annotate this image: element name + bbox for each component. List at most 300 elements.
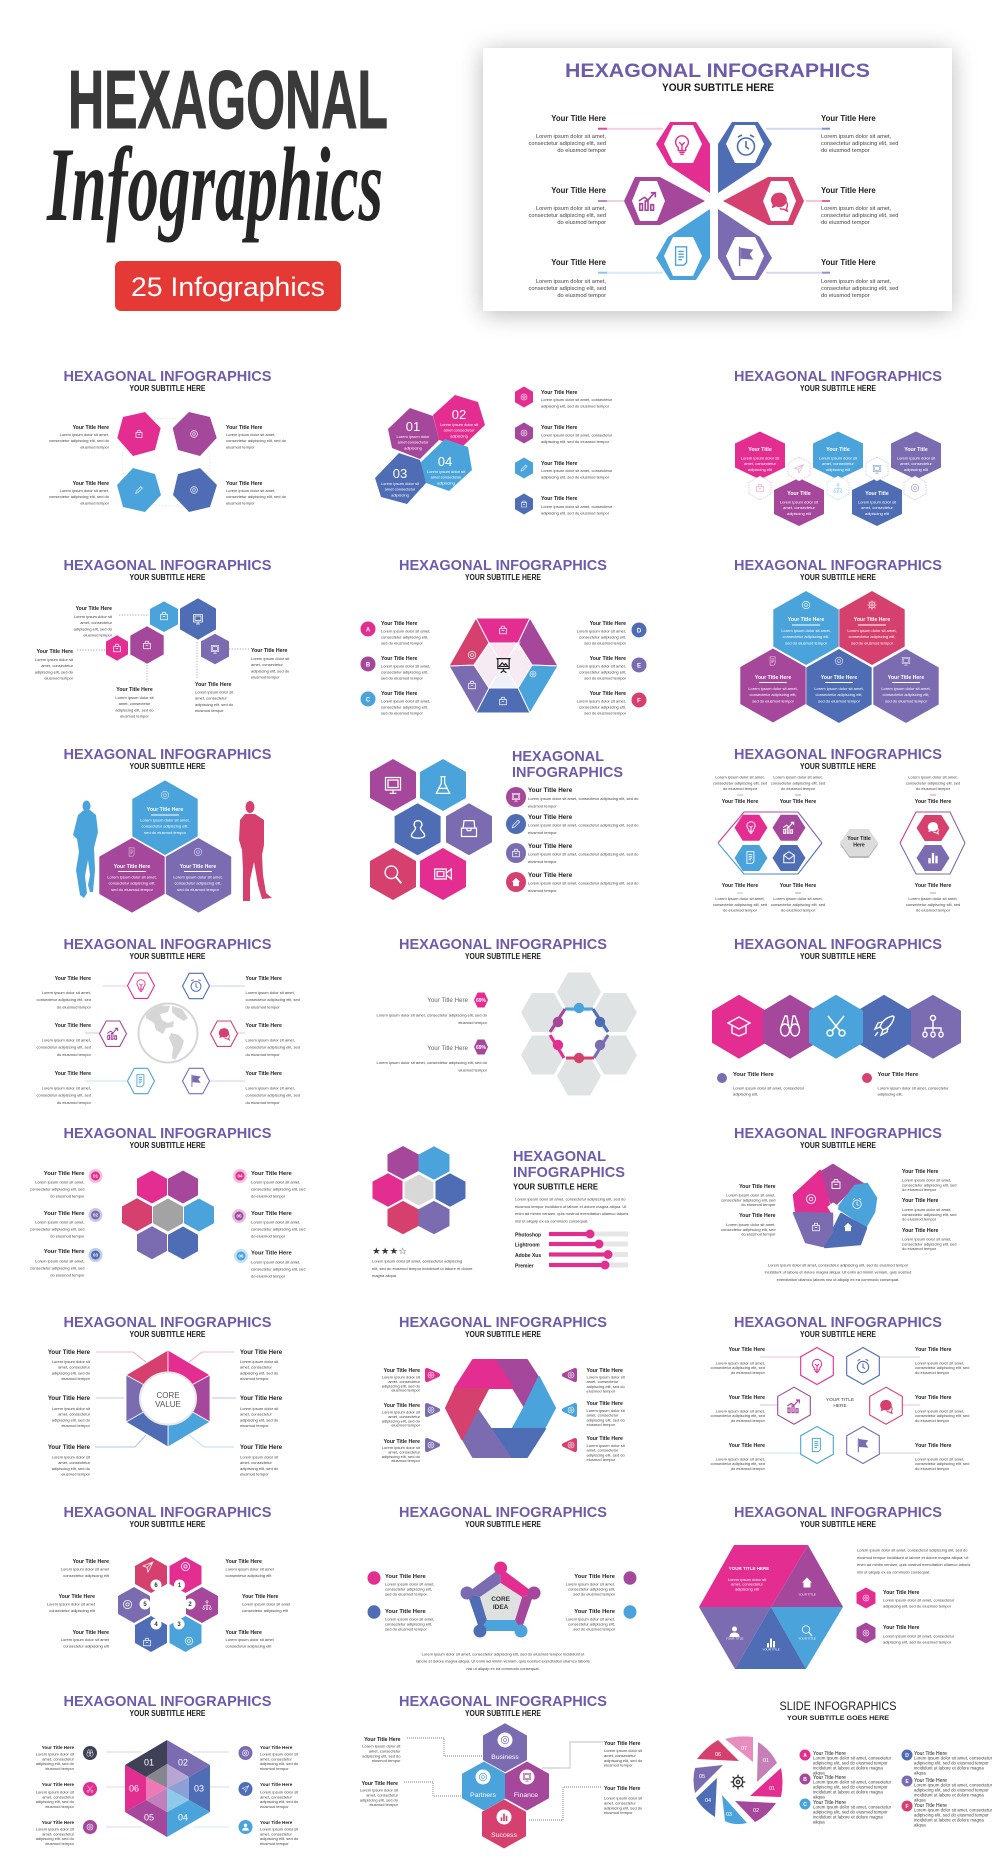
wheel blades bbox=[694, 1736, 782, 1824]
left text: Lorem ipsum dolor sit amet, bbox=[35, 1258, 84, 1264]
card text: right column: Lorem ipsum dolor sit amet, bbox=[821, 206, 891, 212]
right text bbox=[586, 1368, 626, 1462]
heading: HEXAGONAL INFOGRAPHICS bbox=[734, 558, 942, 574]
letter badges: F bbox=[637, 698, 641, 704]
left list text: Lorem ipsum dolor sit amet, bbox=[381, 664, 430, 668]
right text: amet, consectetur bbox=[260, 1831, 292, 1836]
panel 2: numbered hexagons with list bbox=[375, 386, 613, 515]
callout text: adipiscing elit, sed do bbox=[251, 668, 290, 673]
text blocks: Lorem ipsum dolor sit amet, consectetur adipiscing elit, sed do bbox=[376, 1060, 487, 1065]
heading: YOUR SUBTITLE HERE bbox=[130, 384, 206, 393]
hexagon text: sed do eiusmod tempor bbox=[111, 887, 154, 892]
hexagon text: adipiscing elit bbox=[865, 511, 890, 516]
callout text: amet, consectetur bbox=[195, 696, 227, 701]
callout text: amet, consectetur bbox=[119, 701, 151, 706]
hexagon text: sed do eiusmod tempor bbox=[851, 640, 894, 645]
left text: Your Title Here bbox=[48, 1396, 91, 1402]
left text: Lorem ipsum dolor sit bbox=[52, 1359, 90, 1364]
right text: do eiusmod tempor bbox=[902, 1246, 937, 1251]
right list text: sed do eiusmod tempor bbox=[584, 710, 627, 716]
left text: amet, consectetur bbox=[388, 1379, 421, 1384]
top text blocks: Your Title Here bbox=[915, 799, 951, 805]
card text: right column: Lorem ipsum dolor sit amet, bbox=[821, 279, 891, 285]
bottom text blocks: consectetur adipiscing elit, sed bbox=[906, 902, 960, 907]
hexagon text: Lorem ipsum dolor sit amet, bbox=[107, 874, 157, 880]
callout text: eiusmod tempor bbox=[251, 675, 280, 680]
heading bbox=[64, 747, 272, 771]
right list text: aliqua bbox=[914, 1822, 926, 1828]
right text: Your Title Here bbox=[246, 976, 282, 982]
gem hexagon: 06 bbox=[129, 1784, 139, 1794]
left text: do eiusmod tempor bbox=[50, 1234, 85, 1238]
text blocks left: Your Title Here bbox=[73, 481, 109, 487]
list text: Lorem ipsum dolor sit amet, consectetur bbox=[883, 1634, 954, 1638]
list icons bbox=[515, 386, 533, 514]
right text: Lorem ipsum dolor sit amet, bbox=[246, 1038, 295, 1042]
right text bbox=[240, 1350, 283, 1477]
skill bars: Photoshop bbox=[515, 1232, 541, 1238]
left text: Lorem ipsum dolor sit bbox=[36, 1826, 74, 1832]
heading: YOUR SUBTITLE HERE bbox=[465, 1330, 542, 1339]
numbered badges: 01 bbox=[93, 1174, 98, 1178]
number badges: 5 bbox=[143, 1602, 147, 1608]
number badges: 1 bbox=[178, 1583, 182, 1589]
right text: adipiscing elit, sed do bbox=[260, 1761, 299, 1766]
numbered hexagon cluster: 01 bbox=[406, 419, 420, 434]
left text: sed do eiusmod tempor bbox=[385, 1626, 427, 1631]
panel 19: numbered hexagon ring bbox=[47, 1505, 291, 1652]
left text: eiusmod tempor bbox=[45, 1766, 75, 1771]
panel 13: hexagon flower with numbered lists bbox=[30, 1126, 305, 1278]
core circle: VALUE bbox=[155, 1400, 181, 1409]
left text: Lorem ipsum dolor sit bbox=[382, 1410, 420, 1414]
list text: Lorem ipsum dolor sit amet, consectetur adipiscing elit, sed do bbox=[528, 796, 638, 801]
left text: adipiscing elit, sed do bbox=[36, 1799, 75, 1804]
numbered hexagon cluster: amet consectetur bbox=[398, 440, 429, 445]
text blocks left: Lorem ipsum dolor sit amet, bbox=[60, 488, 109, 493]
percent badges: 69% bbox=[476, 1045, 487, 1051]
left text: do eiusmod tempor bbox=[57, 1100, 92, 1105]
heading bbox=[734, 1505, 942, 1529]
hexagon text: Lorem ipsum dolor sit bbox=[728, 1577, 766, 1582]
list text: adipiscing elit, sed do eiusmod tempor bbox=[883, 1604, 952, 1609]
left text: Your Title Here bbox=[729, 1443, 765, 1449]
right text: Your Title Here bbox=[251, 1171, 292, 1177]
wheel blades: 02 bbox=[753, 1808, 759, 1814]
left list text: Your Title Here bbox=[813, 1751, 846, 1757]
hexagon text: sed do eiusmod tempor bbox=[885, 698, 928, 703]
right text: consectetur adipiscing elit, sed bbox=[902, 1182, 956, 1187]
text blocks bbox=[376, 997, 488, 1072]
petal: light blue document bbox=[656, 209, 710, 280]
paragraph: eiusmod tempor incididunt ut labore et dolore magna aliqua. Ut bbox=[857, 1555, 969, 1560]
right text: do eiusmod tempor bbox=[246, 1100, 280, 1105]
bottom paragraph: labore et dolore magna aliqua. Ut enim ad minim veniam, quis nostrud exercitation ullamco laboris bbox=[416, 1659, 590, 1664]
paragraph right: enim ad minim veniam, quis nostrud exercitation ullamco laboris bbox=[515, 1211, 628, 1216]
letter badges: C bbox=[803, 1802, 807, 1808]
heading: HEXAGONAL INFOGRAPHICS bbox=[734, 937, 942, 953]
card text: right column: do eiusmod tempor bbox=[821, 220, 870, 226]
right list text: incididunt ut labore et dolore magna bbox=[914, 1792, 984, 1798]
panel 18: outlined hexagon ring with center title bbox=[711, 1315, 969, 1471]
callout text: adipiscing elit, sed do bbox=[35, 669, 74, 674]
letter badges: A bbox=[366, 628, 371, 634]
hexagon text: adipiscing elit bbox=[826, 467, 851, 472]
hexagon text: YOUR TITLE bbox=[798, 1636, 816, 1640]
hexagon text: Lorem ipsum dolor sit bbox=[858, 500, 896, 504]
left text: consectetur adipiscing elit, sed bbox=[721, 1197, 776, 1202]
right list text: consectetur adipiscing elit, bbox=[579, 634, 626, 640]
left text: do eiusmod tempor bbox=[50, 1194, 85, 1198]
heading: YOUR SUBTITLE HERE bbox=[465, 1520, 542, 1529]
right text: Lorem ipsum dolor sit amet, bbox=[566, 1616, 615, 1622]
letter badges: A bbox=[803, 1753, 807, 1759]
numbered badges: 03 bbox=[93, 1252, 98, 1258]
heading: YOUR SUBTITLE HERE bbox=[800, 1330, 877, 1339]
right list text: aliqua bbox=[914, 1798, 926, 1802]
right text: amet, consectetur bbox=[586, 1448, 619, 1453]
numbered hexagon cluster: adipiscing bbox=[391, 492, 409, 497]
left text: Lorem ipsum dolor sit bbox=[382, 1374, 420, 1380]
callout text: adipiscing elit, sed do bbox=[115, 707, 154, 712]
right text: consectetur adipiscing elit, sed bbox=[915, 1413, 969, 1418]
paragraph: nisi ut aliquip ex ea commodo consequat. bbox=[857, 1569, 930, 1574]
heading bbox=[399, 1694, 607, 1718]
gray hexagons bbox=[521, 972, 637, 1096]
card text: left column: consectetur adipiscing elit, sed bbox=[529, 286, 606, 292]
card text: left column: Lorem ipsum dolor sit amet, bbox=[536, 279, 606, 285]
hexagons: Success bbox=[491, 1832, 517, 1839]
left list text: adipiscing elit, sed do eiusmod tempor bbox=[813, 1810, 888, 1814]
heading: HEXAGONAL INFOGRAPHICS bbox=[64, 1315, 272, 1331]
right text: do eiusmod tempor bbox=[246, 1004, 280, 1009]
numbered hexagon cluster: adipiscing bbox=[404, 445, 422, 450]
top text blocks: do eiusmod tempor bbox=[916, 786, 951, 791]
core circle: CORE bbox=[156, 1391, 180, 1400]
text blocks right: eiusmod tempor bbox=[226, 500, 255, 505]
letter badges: B bbox=[366, 662, 371, 668]
right text: Lorem ipsum dolor sit amet, bbox=[902, 1207, 951, 1212]
right text: amet, consectetur bbox=[240, 1365, 272, 1370]
left text: Your Title Here bbox=[362, 1781, 398, 1787]
percent badges: 69% bbox=[476, 998, 487, 1004]
left list text bbox=[381, 621, 430, 716]
wheel blades: 07 bbox=[741, 1746, 747, 1752]
left text: amet, consectetur bbox=[388, 1449, 421, 1454]
left text: Lorem ipsum dolor sit amet, bbox=[35, 1220, 84, 1224]
hexagon text: Lorem ipsum dolor sit amet, bbox=[748, 686, 798, 691]
dotted connectors bbox=[404, 1738, 602, 1820]
right list text: Your Title Here bbox=[914, 1751, 947, 1757]
left text: amet, consectetur bbox=[42, 1756, 75, 1761]
left list text: incididunt ut labore et dolore magna bbox=[813, 1766, 883, 1770]
left text: Your Title Here bbox=[385, 1609, 426, 1615]
colored ring bbox=[550, 1003, 608, 1063]
right text: Your Title Here bbox=[242, 1594, 279, 1600]
callout text: eiusmod tempor bbox=[83, 633, 113, 638]
heading: INFOGRAPHICS bbox=[512, 764, 623, 781]
right list text: Your Title Here bbox=[590, 621, 626, 627]
left text: do eiusmod tempor bbox=[741, 1232, 776, 1237]
inner hexagons bbox=[734, 815, 950, 871]
heading: YOUR SUBTITLE HERE bbox=[130, 1520, 206, 1529]
heading: YOUR SUBTITLE HERE bbox=[465, 1709, 542, 1718]
top text blocks: Your Title Here bbox=[780, 799, 816, 805]
right list text: sed do eiusmod tempor bbox=[584, 676, 627, 680]
left list text: Lorem ipsum dolor sit amet, bbox=[381, 628, 430, 634]
letter badges: D bbox=[905, 1753, 909, 1759]
right list text: adipiscing elit, sed do eiusmod tempor bbox=[914, 1760, 989, 1766]
hexagon text: YOUR TITLE HERE bbox=[729, 1566, 769, 1571]
top text blocks: consectetur adipiscing elit, sed bbox=[906, 780, 960, 785]
text blocks right: consectetur adipiscing elit, sed do bbox=[226, 494, 287, 499]
left text: Lorem ipsum dolor sit amet bbox=[47, 1602, 95, 1606]
numbered hexagon cluster: Lorem ipsum dolor sit bbox=[381, 481, 419, 486]
right text: Lorem ipsum dolor sit bbox=[240, 1454, 278, 1460]
panel 22: gem hexagon with badges bbox=[36, 1694, 299, 1846]
card text: left column: Lorem ipsum dolor sit amet, bbox=[536, 134, 606, 140]
top text blocks: do eiusmod tempor bbox=[723, 786, 758, 791]
left text: adipiscing elit, sed do bbox=[36, 1836, 75, 1841]
connector lines bbox=[95, 1352, 236, 1447]
top text blocks: do eiusmod tempor bbox=[781, 786, 816, 791]
heading bbox=[64, 1315, 272, 1339]
left text: amet, consectetur bbox=[388, 1414, 421, 1419]
hexagon ring bbox=[118, 1557, 218, 1652]
left text bbox=[711, 1347, 766, 1471]
right text: Lorem ipsum dolor sit amet bbox=[226, 1566, 274, 1572]
callout text bbox=[35, 606, 290, 719]
text blocks: eiusmod tempor bbox=[458, 1020, 488, 1025]
list text: Your Title Here bbox=[883, 1625, 920, 1631]
right text: do eiusmod tempor bbox=[915, 1418, 950, 1423]
list text: Your Title Here bbox=[883, 1590, 920, 1596]
heading: YOUR SUBTITLE HERE bbox=[800, 952, 877, 961]
text blocks right: Lorem ipsum dolor sit amet, bbox=[226, 488, 275, 493]
left list text: consectetur adipiscing elit, bbox=[381, 704, 428, 710]
right text: Lorem ipsum dolor sit bbox=[604, 1748, 642, 1753]
list text: Your Title Here bbox=[541, 390, 578, 396]
text blocks right bbox=[226, 425, 287, 505]
left list text: sed do eiusmod tempor bbox=[381, 710, 423, 716]
hexagon text: sed do eiusmod tempor bbox=[752, 698, 795, 703]
hexagon text: amet, consectetur bbox=[731, 1582, 764, 1587]
right text: Your Title Here bbox=[260, 1782, 293, 1787]
left text: Your Title Here bbox=[384, 1403, 420, 1409]
right list text bbox=[914, 1751, 993, 1828]
callout text: Your Title Here bbox=[195, 682, 232, 688]
dotted connectors bbox=[77, 615, 249, 682]
right text: consectetur adipiscing elit bbox=[226, 1573, 272, 1578]
right text: Your Title Here bbox=[251, 1250, 292, 1256]
numbered hexagon cluster: 03 bbox=[393, 466, 407, 481]
card text: left column: consectetur adipiscing elit, sed bbox=[529, 141, 606, 147]
connector lines bbox=[85, 986, 245, 1081]
left text bbox=[48, 1350, 91, 1477]
right list text: incididunt ut labore et dolore magna bbox=[914, 1818, 984, 1822]
left text: adipiscing elit, sed do bbox=[382, 1383, 421, 1388]
right text: adipiscing elit, sed do bbox=[260, 1799, 299, 1804]
right text: eiusmod tempor bbox=[586, 1389, 616, 1394]
left text: Lorem ipsum dolor sit amet, bbox=[385, 1616, 434, 1622]
globe bbox=[138, 1004, 198, 1062]
left text: Your Title Here bbox=[73, 1559, 109, 1565]
left text: Your Title Here bbox=[42, 1820, 74, 1825]
list text: Your Title Here bbox=[528, 787, 573, 794]
petal: red chat bbox=[723, 177, 804, 225]
left list text: consectetur adipiscing elit, bbox=[381, 634, 428, 640]
right text: Your Title Here bbox=[226, 1559, 262, 1565]
legend text: adipiscing elit, bbox=[878, 1092, 903, 1096]
right text: Your Title Here bbox=[902, 1198, 939, 1204]
right text: sed do eiusmod tempor bbox=[573, 1591, 616, 1596]
right text: eiusmod tempor bbox=[240, 1376, 269, 1381]
panel 4: hexagons with dotted callouts bbox=[35, 558, 290, 719]
pentagon bbox=[460, 1562, 540, 1638]
right text: eiusmod tempor bbox=[586, 1457, 616, 1462]
right text: do eiusmod tempor bbox=[902, 1187, 937, 1192]
left text: Lorem ipsum dolor sit bbox=[382, 1445, 420, 1450]
hexagon text: amet, consectetur bbox=[861, 505, 894, 510]
right text: consectetur adipiscing elit bbox=[242, 1608, 289, 1613]
list text: Your Title Here bbox=[541, 496, 578, 502]
panel 10: globe with outlined hexagons bbox=[37, 937, 300, 1105]
left list text bbox=[813, 1751, 892, 1824]
callout text: eiusmod tempor bbox=[44, 676, 74, 681]
right text: amet, consectetur bbox=[586, 1413, 619, 1418]
wheel blades: 04 bbox=[705, 1798, 711, 1804]
text blocks left: Lorem ipsum dolor sit amet, bbox=[60, 432, 109, 437]
left text: Your Title Here bbox=[384, 1439, 420, 1445]
left text: consectetur adipiscing elit bbox=[49, 1608, 96, 1613]
left text: Your Title Here bbox=[42, 1745, 74, 1750]
left list text: Your Title Here bbox=[813, 1800, 846, 1806]
right list text bbox=[577, 621, 627, 716]
card text: right column: consectetur adipiscing elit, sed bbox=[821, 141, 898, 147]
left text: amet, consectetur bbox=[42, 1831, 75, 1836]
panel 20: core idea pentagon bbox=[368, 1505, 636, 1671]
hexagons: Finance bbox=[514, 1792, 538, 1799]
paragraph: enim ad minim veniam, quis nostrud exercitation ullamco laboris bbox=[857, 1562, 970, 1567]
hexagon text: sed do eiusmod tempor bbox=[144, 830, 187, 835]
heading bbox=[734, 369, 942, 393]
heading bbox=[734, 1315, 942, 1339]
hexagon text: adipiscing elit bbox=[735, 1586, 760, 1591]
right text bbox=[226, 1559, 291, 1648]
left text: consectetur adipiscing elit, sed bbox=[37, 997, 91, 1002]
panel 6: five large hexagons bbox=[734, 558, 942, 723]
callout text: Your Title Here bbox=[76, 606, 112, 612]
hexagon text: consectetur adipiscing elit, bbox=[142, 824, 188, 829]
left text: Your Title Here bbox=[384, 1368, 420, 1374]
bottom text blocks: do eiusmod tempor bbox=[916, 908, 951, 913]
left list text: consectetur adipiscing elit, bbox=[381, 670, 428, 674]
card heading: HEXAGONAL INFOGRAPHICS bbox=[565, 60, 870, 82]
bottom text blocks: Your Title Here bbox=[780, 883, 816, 889]
right text: eiusmod tempor bbox=[604, 1810, 633, 1815]
left text: Your Title Here bbox=[729, 1395, 765, 1401]
skill bars bbox=[515, 1230, 628, 1270]
text blocks right: Lorem ipsum dolor sit amet, bbox=[226, 432, 275, 437]
right text: Your Title Here bbox=[915, 1347, 952, 1353]
top text blocks: consectetur adipiscing elit, sed bbox=[713, 780, 767, 785]
right text: Lorem ipsum dolor sit bbox=[240, 1359, 278, 1364]
card text: right column bbox=[821, 114, 898, 299]
number badges: 3 bbox=[177, 1622, 181, 1628]
numbered hexagon cluster: amet consectetur bbox=[444, 428, 475, 433]
right text: Lorem ipsum dolor sit amet, bbox=[915, 1360, 964, 1366]
right text: eiusmod tempor bbox=[260, 1841, 289, 1846]
hexagon text: consectetur adipiscing elit, bbox=[783, 634, 829, 639]
numbered hexagon cluster: amet consectetur bbox=[385, 487, 416, 492]
legend text: Your Title Here bbox=[878, 1072, 919, 1078]
heading: HEXAGONAL INFOGRAPHICS bbox=[734, 369, 942, 385]
number badges: 2 bbox=[188, 1602, 192, 1608]
hexagons: Business bbox=[491, 1754, 519, 1761]
right text: adipiscing elit, sed do bbox=[240, 1370, 279, 1375]
hexagon text: Lorem ipsum dolor sit bbox=[780, 500, 818, 504]
heading bbox=[399, 558, 607, 582]
hexagons bbox=[99, 780, 231, 913]
left text: Lorem ipsum dolor sit bbox=[36, 1790, 74, 1794]
right text: Your Title Here bbox=[604, 1786, 641, 1792]
right text: Lorem ipsum dolor sit bbox=[586, 1374, 625, 1380]
list text: Lorem ipsum dolor sit amet, consectetur adipiscing elit, sed do bbox=[528, 822, 638, 828]
right text: Your Title Here bbox=[902, 1228, 939, 1234]
hexagon text: adipiscing elit bbox=[787, 511, 812, 516]
hexagon text: consectetur adipiscing elit, bbox=[109, 881, 155, 886]
left list text: aliqua bbox=[813, 1794, 825, 1800]
paragraph: Lorem ipsum dolor sit amet, consectetur adipiscing elit, sed do bbox=[857, 1548, 968, 1552]
heading bbox=[734, 558, 942, 582]
right text: Your Title Here bbox=[246, 1023, 282, 1029]
top text blocks: consectetur adipiscing elit, sed bbox=[771, 780, 825, 785]
left list text: Your Title Here bbox=[381, 691, 418, 697]
segmented hexagon bbox=[449, 618, 558, 713]
petal: purple chart bbox=[624, 177, 705, 225]
hexagon text: Your Title bbox=[826, 447, 850, 453]
right text: eiusmod tempor bbox=[260, 1804, 289, 1809]
left text: Lorem ipsum dolor sit amet, bbox=[726, 1192, 776, 1198]
hexagons bbox=[106, 598, 229, 664]
left text bbox=[47, 1559, 110, 1648]
letter badges bbox=[800, 1750, 912, 1812]
hexagon text: amet, consectetur bbox=[900, 461, 933, 466]
letter badges: B bbox=[803, 1777, 807, 1783]
text blocks: Your Title Here bbox=[427, 1045, 469, 1052]
card text: right column: Your Title Here bbox=[821, 186, 876, 195]
list text: adipiscing elit, sed do eiusmod tempor bbox=[541, 474, 610, 479]
top text blocks: Lorem ipsum dolor sit amet, bbox=[715, 774, 765, 780]
callout text: Lorem ipsum dolor sit bbox=[251, 656, 289, 661]
heading: HEXAGONAL INFOGRAPHICS bbox=[64, 1126, 272, 1142]
list text: Lorem ipsum dolor sit amet, consectetur adipiscing elit, sed do bbox=[528, 852, 638, 856]
hexagon text: Your Title Here bbox=[755, 675, 791, 681]
legend text: Lorem ipsum dolor sit amet, consectetur bbox=[878, 1086, 949, 1090]
right text: amet, consectetur bbox=[260, 1756, 292, 1761]
heading: YOUR SUBTITLE HERE bbox=[800, 1141, 877, 1150]
heading: HEXAGONAL INFOGRAPHICS bbox=[399, 1694, 607, 1710]
list text: adipiscing elit, sed do eiusmod tempor bbox=[541, 439, 610, 444]
wheel blades: 03 bbox=[726, 1812, 732, 1818]
left text: eiusmod tempor bbox=[45, 1841, 75, 1846]
letter badges: E bbox=[637, 664, 641, 670]
top text blocks: Lorem ipsum dolor sit amet, bbox=[773, 774, 823, 780]
left text: Your Title Here bbox=[59, 1594, 95, 1600]
right text: amet, consectetur bbox=[260, 1794, 292, 1799]
right text: Lorem ipsum dolor sit amet, bbox=[902, 1178, 951, 1182]
heading: HEXAGONAL INFOGRAPHICS bbox=[64, 369, 272, 385]
